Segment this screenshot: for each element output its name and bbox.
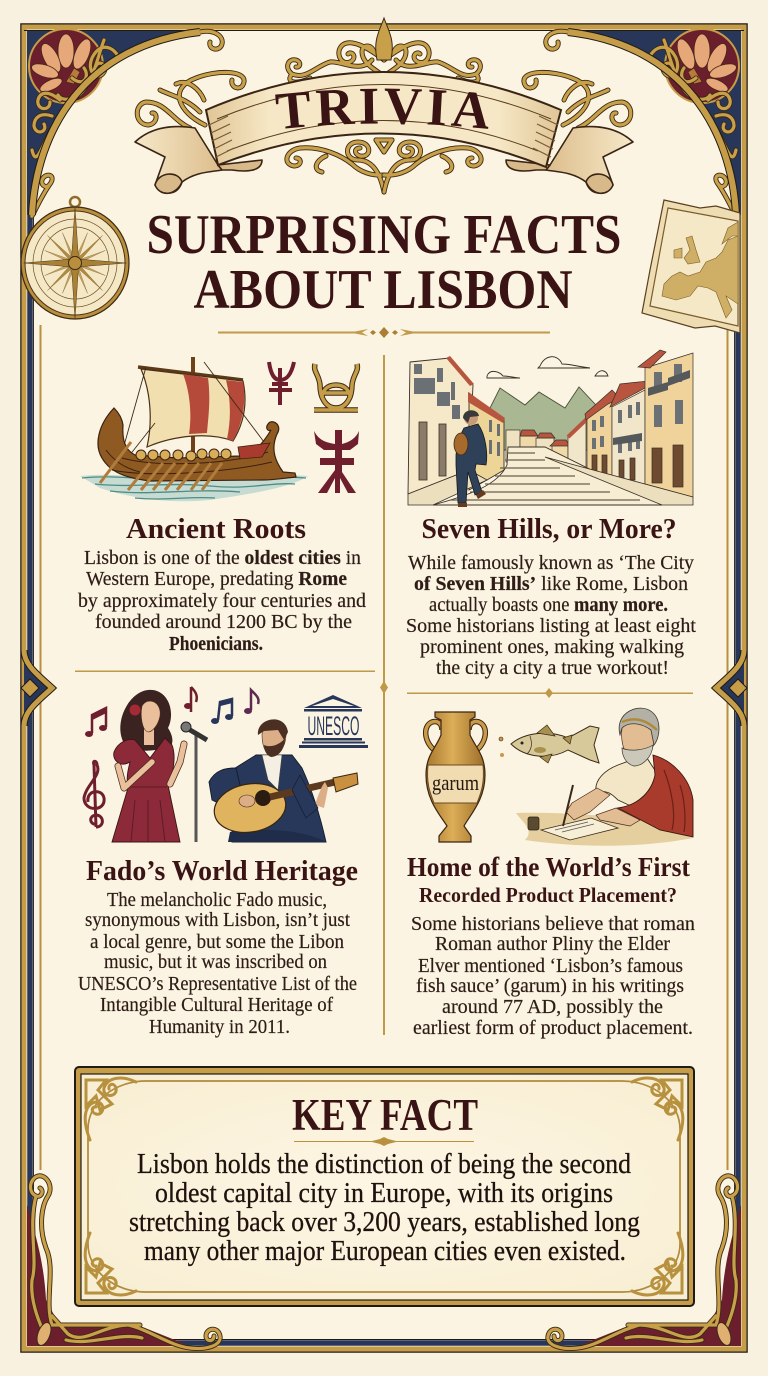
heading: Fado’s World Heritage bbox=[86, 855, 358, 887]
body text: synonymous with Lisbon, isn’t just bbox=[85, 909, 350, 931]
body text: music, but it was inscribed on bbox=[104, 951, 327, 973]
body text: earliest form of product placement. bbox=[413, 1017, 693, 1039]
body text: of Seven Hills’ like Rome, Lisbon bbox=[414, 573, 688, 595]
body text: the city a city a true workout! bbox=[436, 657, 669, 679]
frame corners bbox=[85, 1078, 683, 1295]
top-left corner ornament bbox=[27, 29, 222, 216]
body text: While famously known as ‘The City bbox=[408, 552, 694, 574]
illustration: Lisbon street bbox=[408, 350, 693, 505]
illustration: Pliny the Elder bbox=[516, 708, 693, 846]
body text: a local genre, but some the Libon bbox=[90, 931, 344, 953]
body text bbox=[411, 913, 695, 1039]
body text: Some historians listing at least eight bbox=[406, 615, 696, 637]
icon: garum amphora bbox=[426, 712, 485, 842]
panel: Fado bbox=[78, 687, 368, 1038]
body text: Western Europe, predating Rome bbox=[86, 568, 347, 590]
side ornament left bbox=[21, 650, 52, 726]
title: ABOUT LISBON bbox=[194, 259, 572, 321]
heading: Recorded Product Placement? bbox=[419, 883, 677, 907]
panel: Product placement bbox=[407, 708, 695, 1039]
body text: prominent ones, making walking bbox=[420, 636, 684, 658]
icon: fish bbox=[499, 725, 599, 763]
body text: Some historians believe that roman bbox=[411, 913, 695, 935]
title: SURPRISING FACTS bbox=[146, 204, 622, 266]
section dividers bbox=[75, 355, 693, 1035]
body text: Elver mentioned ‘Lisbon’s famous bbox=[418, 955, 683, 977]
ribbon tails bbox=[135, 127, 633, 193]
icon: garum amphora: garum bbox=[432, 770, 479, 795]
icon: Phoenician ship bbox=[80, 357, 308, 501]
panel: Ancient Roots bbox=[78, 357, 366, 655]
ornament below ribbon bbox=[287, 140, 481, 192]
heading: Home of the World’s First bbox=[407, 852, 690, 882]
body text: UNESCO’s Representative List of the bbox=[78, 973, 357, 995]
body text: around 77 AD, possibly the bbox=[442, 996, 663, 1018]
ribbon title: TRIVIA bbox=[275, 88, 488, 129]
body text: The melancholic Fado music, bbox=[107, 889, 327, 911]
title bbox=[146, 204, 622, 321]
body text bbox=[78, 547, 366, 655]
side ornament right bbox=[716, 650, 747, 726]
key fact text: Lisbon holds the distinction of being the second bbox=[137, 1148, 631, 1180]
walking figure bbox=[454, 410, 487, 507]
crest ornament bbox=[288, 18, 480, 82]
bottom-right corner ornament bbox=[548, 1176, 741, 1348]
key fact text bbox=[129, 1148, 640, 1267]
banner: TRIVIA bbox=[134, 16, 634, 194]
body text: founded around 1200 BC by the bbox=[95, 611, 352, 633]
key fact text: stretching back over 3,200 years, established long bbox=[129, 1206, 640, 1238]
panel: Seven Hills bbox=[406, 350, 696, 679]
icon: Phoenician glyphs bbox=[269, 362, 359, 493]
icon: microphone stand bbox=[181, 722, 207, 842]
body text bbox=[406, 552, 696, 679]
body text: Lisbon is one of the oldest cities in bbox=[84, 547, 361, 569]
key fact text: many other major European cities even existed. bbox=[144, 1235, 626, 1267]
body text: by approximately four centuries and bbox=[78, 590, 366, 612]
bottom-left corner ornament bbox=[27, 1176, 220, 1348]
icon: music notes bbox=[84, 687, 259, 827]
body text bbox=[78, 889, 357, 1038]
heading: Seven Hills, or More? bbox=[422, 513, 676, 545]
body text: actually boasts one many more. bbox=[429, 594, 668, 616]
icon: UNESCO temple bbox=[299, 695, 368, 748]
side flourishes bbox=[137, 72, 631, 128]
illustration: singer bbox=[112, 690, 184, 842]
heading divider bbox=[294, 1137, 474, 1146]
icon: compass bbox=[21, 197, 129, 319]
heading: Ancient Roots bbox=[126, 513, 306, 545]
title divider bbox=[218, 327, 550, 338]
panel: Key Fact bbox=[75, 1067, 694, 1306]
body text: Phoenicians. bbox=[169, 633, 263, 655]
illustration: guitarist bbox=[209, 719, 358, 842]
body text: Roman author Pliny the Elder bbox=[435, 933, 670, 955]
key fact text: oldest capital city in Europe, with its origins bbox=[155, 1177, 613, 1209]
body text: Intangible Cultural Heritage of bbox=[100, 994, 333, 1016]
heading bbox=[407, 852, 690, 907]
body text: fish sauce’ (garum) in his writings bbox=[416, 975, 684, 997]
icon: UNESCO temple: UNESCO bbox=[308, 711, 360, 741]
heading: KEY FACT bbox=[292, 1090, 478, 1140]
icon: map of Europe bbox=[642, 200, 740, 333]
body text: Humanity in 2011. bbox=[149, 1016, 290, 1038]
top-right corner ornament bbox=[546, 29, 741, 216]
ribbon centre bbox=[206, 72, 561, 167]
